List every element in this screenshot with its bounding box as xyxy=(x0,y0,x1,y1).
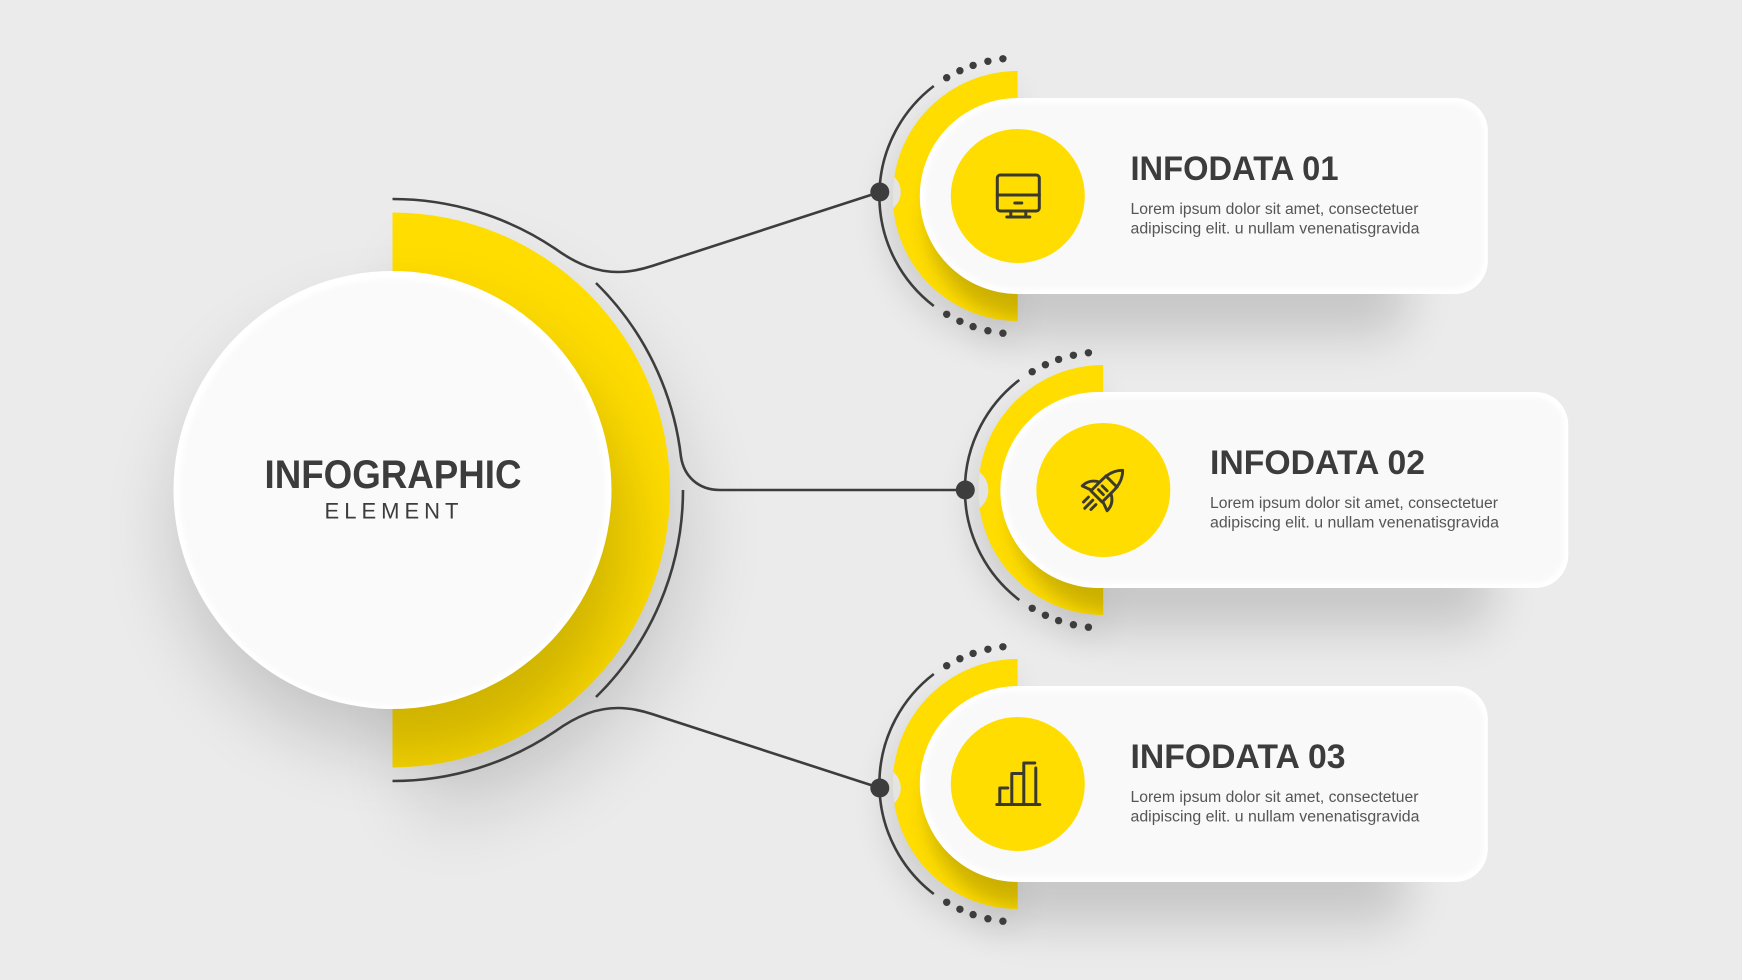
dots xyxy=(943,55,1007,337)
description: Lorem ipsum dolor sit amet, consectetuer xyxy=(1130,201,1418,218)
panel: infodata 02 xyxy=(942,349,1568,635)
yellow half ring xyxy=(892,71,1018,321)
main title xyxy=(264,453,522,524)
description: Lorem ipsum dolor sit amet, consectetuer xyxy=(1210,495,1498,512)
icon: rocket xyxy=(1072,458,1135,521)
node xyxy=(870,778,889,798)
description: Lorem ipsum dolor sit amet, consectetuer xyxy=(1130,789,1418,806)
main title: ELEMENT xyxy=(324,498,458,524)
main white circle xyxy=(174,271,612,709)
main circle shadow xyxy=(178,260,692,815)
description: adipiscing elit. u nullam venenatisgravida xyxy=(1130,808,1420,825)
card xyxy=(920,98,1488,294)
yellow half ring xyxy=(978,365,1104,615)
node xyxy=(956,480,975,500)
main yellow half ring xyxy=(392,212,670,768)
icon: bar chart xyxy=(997,763,1040,804)
yellow half ring xyxy=(892,659,1018,909)
icon: monitor xyxy=(997,175,1039,217)
description xyxy=(1130,789,1420,825)
main title: INFOGRAPHIC xyxy=(264,453,522,497)
heading: INFODATA 02 xyxy=(1210,444,1425,482)
outline arc xyxy=(879,674,934,894)
card shadow xyxy=(972,385,1493,635)
dots xyxy=(1028,349,1092,631)
yellow icon circle xyxy=(951,129,1085,263)
panel: infodata 01 xyxy=(859,55,1488,341)
heading: INFODATA 03 xyxy=(1130,738,1346,776)
heading: INFODATA 01 xyxy=(1130,150,1338,188)
connector: main to card 3 xyxy=(392,708,880,788)
card xyxy=(1000,392,1568,588)
connector: main to card 1 xyxy=(392,192,880,272)
panel: infodata 03 xyxy=(859,643,1488,929)
card shadow xyxy=(887,91,1408,341)
description xyxy=(1210,495,1499,531)
arc: lower right of main circle xyxy=(596,490,683,697)
dots xyxy=(943,643,1007,925)
description: adipiscing elit. u nullam venenatisgravida xyxy=(1130,220,1420,237)
description xyxy=(1130,201,1420,237)
card xyxy=(920,686,1488,882)
connector: main to card 2 xyxy=(596,283,965,490)
card shadow xyxy=(887,679,1408,929)
node xyxy=(870,182,889,202)
description: adipiscing elit. u nullam venenatisgravida xyxy=(1210,514,1499,531)
outline arc xyxy=(965,380,1019,600)
outline arc xyxy=(879,86,934,306)
yellow icon circle xyxy=(1036,423,1170,557)
yellow icon circle xyxy=(951,717,1085,851)
